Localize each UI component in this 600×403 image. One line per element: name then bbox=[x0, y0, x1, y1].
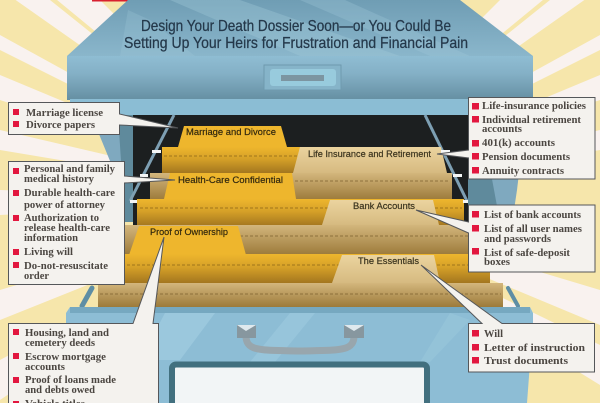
callout: life insurance and retirement bbox=[437, 98, 595, 179]
callout: the essentials: Will bbox=[484, 329, 503, 340]
folder: Proof of Ownership: Proof of Ownership bbox=[150, 227, 228, 238]
callout: life insurance and retirement: Pension documents bbox=[482, 152, 570, 163]
folder: Proof of Ownership bbox=[100, 226, 490, 283]
rail clips and lower rails bbox=[82, 150, 518, 306]
callout: proof of ownership: and debts owed bbox=[25, 385, 95, 396]
folder: Marriage and Divorce: Marriage and Divorce bbox=[186, 127, 276, 138]
callout: health-care: Authorization to bbox=[24, 213, 99, 224]
callout: proof of ownership: Escrow mortgage bbox=[25, 352, 107, 363]
callout: bank accounts bbox=[416, 205, 595, 272]
callout: health-care: information bbox=[24, 233, 78, 244]
callout: proof of ownership bbox=[8, 237, 164, 403]
document window bbox=[172, 364, 427, 403]
callout: health-care: Personal and family bbox=[24, 164, 115, 175]
callout: bank accounts: boxes bbox=[484, 257, 510, 268]
drawer front bbox=[66, 307, 533, 403]
folder: The Essentials bbox=[98, 255, 503, 307]
callout: bank accounts: List of bank accounts bbox=[484, 210, 581, 221]
folder: Life Insurance and Retirement bbox=[150, 147, 452, 200]
subtitle bbox=[124, 18, 468, 52]
callout: health-care: Living will bbox=[24, 247, 73, 258]
subtitle: Design Your Death Dossier Soon—or You Could Be bbox=[141, 18, 451, 35]
callout: health-care: medical history bbox=[24, 174, 94, 185]
callout: health-care: Do-not-resuscitate bbox=[24, 261, 109, 272]
callout: proof of ownership: cemetery deeds bbox=[25, 338, 95, 349]
callout: life insurance and retirement: 401(k) accounts bbox=[482, 138, 555, 149]
top drawer band bbox=[67, 56, 533, 115]
callout: health-care: Durable health-care bbox=[24, 188, 116, 199]
callout: proof of ownership: accounts bbox=[25, 362, 65, 373]
callout: life insurance and retirement: Life-insurance policies bbox=[482, 101, 586, 112]
folder: Bank Accounts bbox=[112, 200, 488, 255]
callout: life insurance and retirement: Annuity contracts bbox=[482, 166, 564, 177]
callout: the essentials: Letter of instruction bbox=[484, 343, 586, 354]
callout: bank accounts: List of safe-deposit bbox=[484, 248, 571, 259]
drawer interior bbox=[133, 115, 468, 225]
folder: Health-Care Confidential bbox=[137, 173, 464, 226]
folder: The Essentials: The Essentials bbox=[358, 256, 419, 267]
folder: Marriage and Divorce bbox=[162, 126, 302, 173]
callout: health-care: power of attorney bbox=[24, 200, 105, 211]
callout: marriage and divorce: Marriage license bbox=[26, 108, 104, 119]
folder: Bank Accounts: Bank Accounts bbox=[353, 201, 415, 212]
right cabinet wall bbox=[462, 56, 533, 270]
rails bbox=[130, 115, 467, 201]
callout: marriage and divorce: Divorce papers bbox=[26, 120, 95, 131]
callout: marriage and divorce bbox=[8, 102, 178, 134]
callout: proof of ownership: Proof of loans made bbox=[25, 375, 117, 386]
drawer label holder bbox=[264, 65, 341, 90]
callout: the essentials: Trust documents bbox=[484, 356, 568, 367]
callout: health-care bbox=[8, 162, 175, 284]
callout: proof of ownership: Housing, land and bbox=[25, 328, 109, 339]
callout: bank accounts: List of all user names bbox=[484, 224, 582, 235]
cabinet lid bbox=[67, 0, 533, 56]
left cabinet wall bbox=[67, 56, 138, 222]
callout: bank accounts: and passwords bbox=[484, 234, 551, 245]
callout: health-care: order bbox=[24, 271, 50, 282]
subtitle: Setting Up Your Heirs for Frustration and Financial Pain bbox=[124, 35, 468, 52]
folder: Life Insurance and Retirement: Life Insurance and Retirement bbox=[308, 149, 431, 160]
callout: life insurance and retirement: Individual retirement bbox=[482, 115, 582, 126]
folder: Health-Care Confidential: Health-Care Confidential bbox=[178, 175, 283, 186]
callout: life insurance and retirement: accounts bbox=[482, 124, 522, 135]
callout: health-care: release health-care bbox=[24, 223, 111, 234]
callout: the essentials bbox=[421, 265, 594, 372]
headline fragments in red bbox=[92, 0, 225, 4]
drawer handle bbox=[237, 325, 364, 351]
